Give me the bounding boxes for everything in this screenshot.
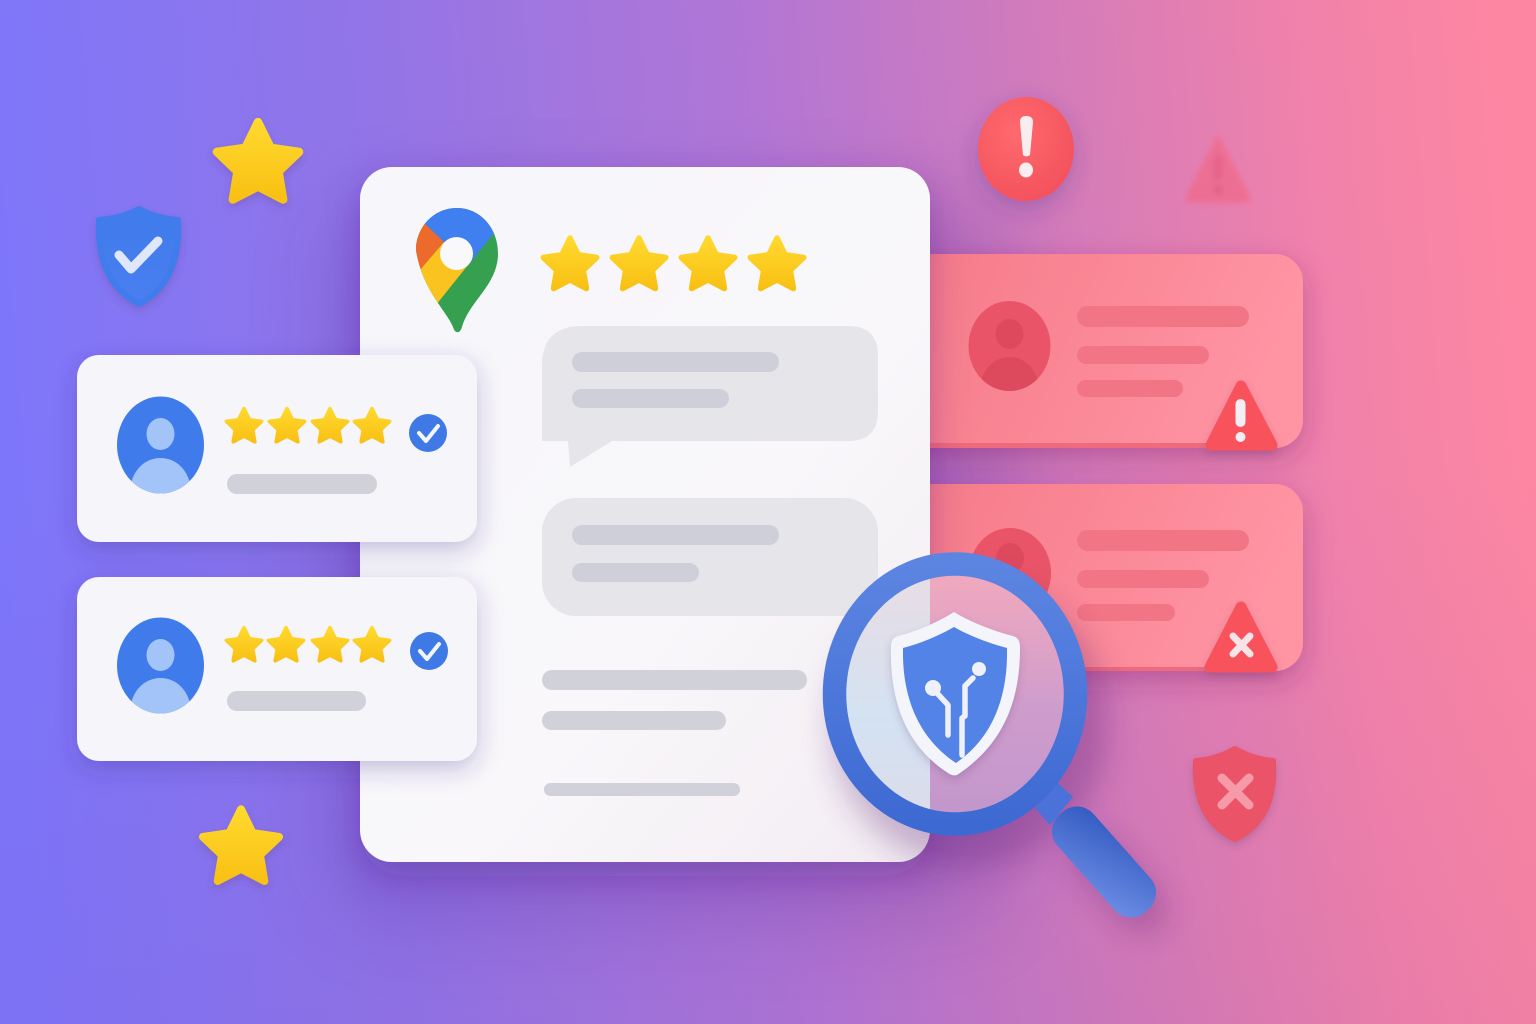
icon: circuit shield <box>891 612 1020 775</box>
text line <box>227 474 377 494</box>
red text lines 1 <box>1077 306 1249 397</box>
icon: red cross shield <box>1196 749 1273 839</box>
red text lines 2 <box>1077 530 1249 621</box>
icon: warning triangle cross <box>1210 607 1272 667</box>
red avatar 2 <box>969 528 1051 618</box>
panel: red review card 1 <box>900 254 1303 448</box>
panel: verified review card 1 <box>77 355 477 542</box>
ring <box>834 564 1076 824</box>
icon: faded warning triangle <box>1186 134 1250 203</box>
blue avatar 2 <box>117 618 204 714</box>
verified badge 1 <box>409 414 447 452</box>
lens <box>846 576 1064 812</box>
panel: verified review card 2 <box>77 577 477 761</box>
blue avatar 1 <box>117 396 204 494</box>
icon: red alert circle <box>978 97 1074 201</box>
icon: map pin <box>416 208 498 332</box>
red avatar 1 <box>968 301 1050 391</box>
panel: red review card 2 <box>900 484 1303 671</box>
speech bubble 1 <box>542 326 878 467</box>
speech bubble 2 <box>542 498 878 616</box>
verified badge 2 <box>410 632 448 670</box>
decorative star: bottom left <box>203 809 279 881</box>
glass shadow <box>832 583 1176 943</box>
handle <box>1035 783 1165 927</box>
panel: main review document <box>360 167 930 862</box>
star rating row 1 <box>226 409 390 442</box>
star rating: 4 stars <box>543 238 804 289</box>
icon: blue check shield <box>99 209 178 304</box>
text line <box>227 691 366 711</box>
magnifying glass <box>832 564 1176 943</box>
star rating row 2 <box>226 628 390 661</box>
decorative star: top left <box>217 122 299 200</box>
icon: warning triangle exclamation <box>1211 386 1272 445</box>
text lines <box>542 670 807 796</box>
